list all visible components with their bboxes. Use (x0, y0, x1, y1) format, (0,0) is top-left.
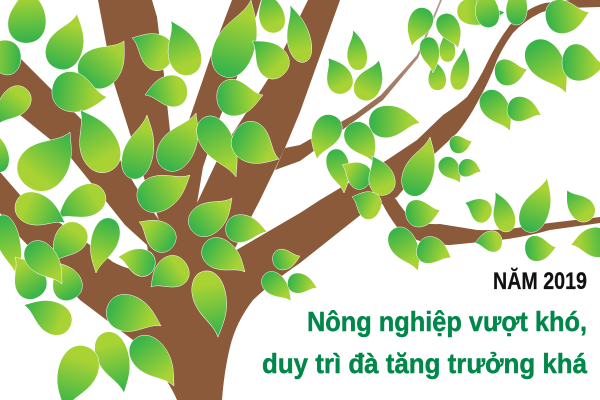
leaves: lower left canopy (0, 159, 319, 400)
thin upper right twig (275, 0, 442, 170)
leaves: upper right cluster (474, 0, 600, 138)
leaves: lower right branch cluster (383, 173, 600, 277)
lower right branch (382, 198, 600, 245)
leaves: upper middle cluster (316, 0, 527, 105)
leaves: central branch cluster (304, 104, 484, 223)
leaves: upper left canopy (0, 0, 316, 201)
